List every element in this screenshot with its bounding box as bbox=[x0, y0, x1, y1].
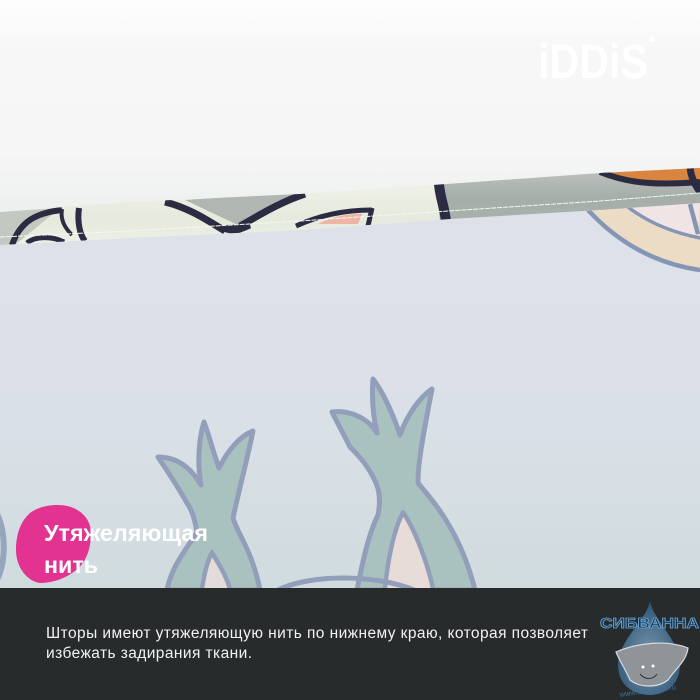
url: www.sibvanna.ru bbox=[618, 682, 676, 699]
logo: IDDIS: iDDiS bbox=[538, 36, 648, 89]
footer description: Шторы имеют утяжеляющую нить по нижнему краю, которая позволяет bbox=[46, 625, 588, 642]
pattern: left onion sprout bbox=[158, 422, 260, 590]
curtain hem band bbox=[0, 168, 700, 245]
watermark logo: Sibvanna bbox=[600, 601, 699, 699]
background wall bbox=[0, 0, 700, 260]
text: нить bbox=[44, 552, 98, 578]
hem: dark print lines bbox=[12, 165, 700, 245]
footer description bbox=[46, 625, 588, 662]
hem: pink patch bbox=[318, 214, 362, 224]
pattern: body arc bbox=[278, 578, 414, 590]
heading: Утяжеляющая bbox=[44, 520, 208, 546]
brand text: СИБВАННА bbox=[600, 615, 699, 632]
bathtub bbox=[616, 643, 688, 686]
hem: stitching bbox=[0, 193, 700, 237]
pattern: right onion sprout bbox=[332, 379, 475, 590]
curtain fabric bbox=[0, 200, 700, 590]
pattern: left edge arc bbox=[0, 508, 4, 585]
footer bar bbox=[0, 588, 700, 700]
drop bbox=[618, 601, 680, 695]
pattern: tan shape top right bbox=[588, 203, 700, 270]
footer description: избежать задирания ткани. bbox=[46, 645, 252, 662]
hem: grey sections bbox=[0, 208, 52, 245]
hem: orange section bbox=[602, 168, 700, 182]
pink blob behind heading bbox=[16, 505, 91, 583]
